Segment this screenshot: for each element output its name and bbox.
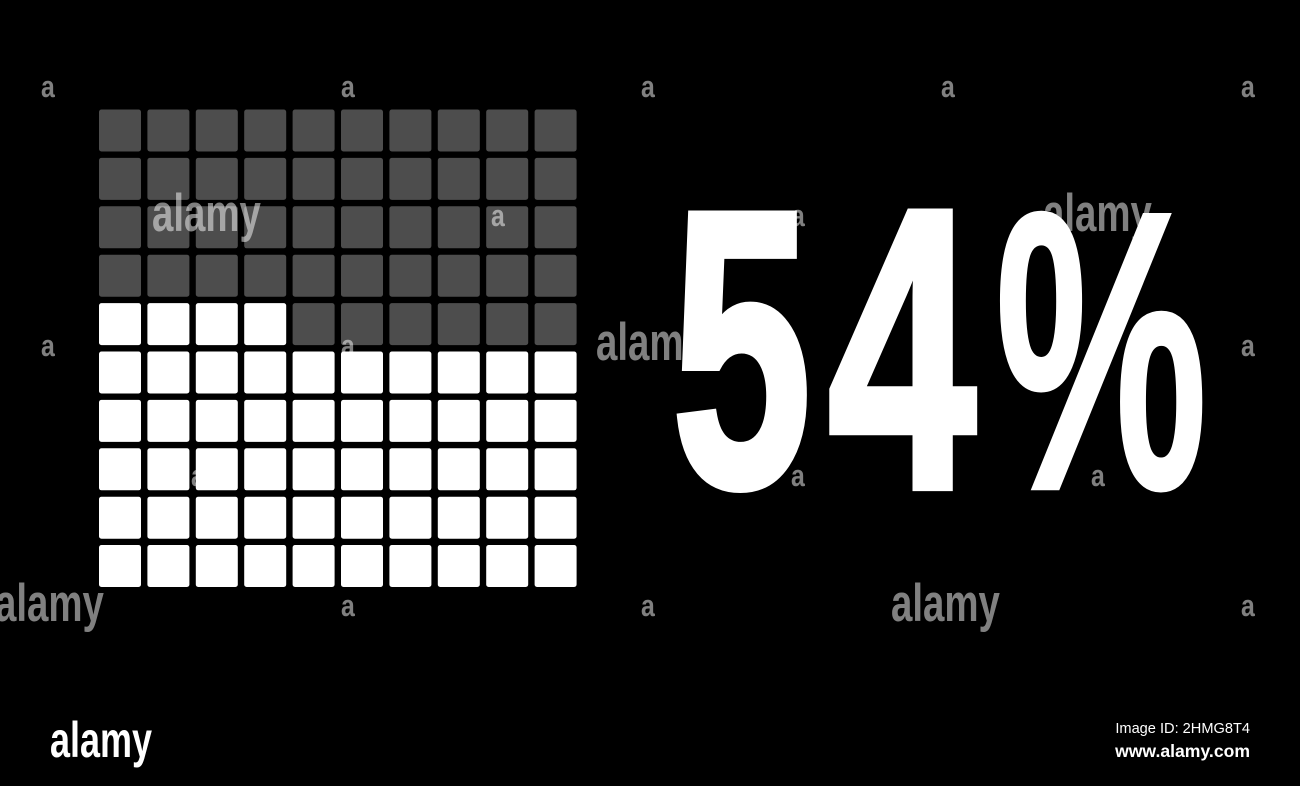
- watermark: small a marks: a: [641, 588, 655, 623]
- digit 5: 5: [672, 130, 811, 569]
- watermark: large alamy marks: alamy: [596, 312, 705, 371]
- watermark: small a marks: a: [1241, 588, 1255, 623]
- digit 4: 4: [828, 126, 978, 572]
- watermark: small a marks: a: [1091, 458, 1105, 493]
- watermark: small a marks: a: [341, 69, 355, 104]
- watermark: small a marks: a: [941, 69, 955, 104]
- watermark: large alamy marks: alamy: [891, 573, 1000, 632]
- watermark: small a marks: [41, 69, 1255, 623]
- watermark: small a marks: a: [41, 69, 55, 104]
- watermark: small a marks: a: [641, 69, 655, 104]
- watermark: small a marks: a: [791, 458, 805, 493]
- watermark: large alamy marks: alamy: [152, 183, 261, 242]
- watermark: small a marks: a: [1241, 69, 1255, 104]
- watermark: small a marks: a: [341, 588, 355, 623]
- big percentage value: [672, 126, 1206, 572]
- watermark: large alamy marks: alamy: [1043, 183, 1152, 242]
- watermark: small a marks: a: [341, 328, 355, 363]
- alamy logo: alamy: [50, 713, 152, 768]
- image ID: Image ID: 2HMG8T4: [1115, 721, 1250, 737]
- watermark: small a marks: a: [41, 328, 55, 363]
- percent sign: %: [996, 138, 1206, 565]
- watermark: large alamy marks: [0, 183, 1152, 632]
- watermark: small a marks: a: [191, 458, 205, 493]
- unfilled squares: [99, 110, 577, 345]
- watermark: small a marks: a: [1241, 328, 1255, 363]
- website: www.alamy.com: [1114, 741, 1250, 761]
- watermark: small a marks: a: [791, 198, 805, 233]
- watermark: small a marks: a: [491, 198, 505, 233]
- waffle chart: 54 of 100 squares filled: [99, 110, 577, 587]
- filled squares: [99, 303, 577, 587]
